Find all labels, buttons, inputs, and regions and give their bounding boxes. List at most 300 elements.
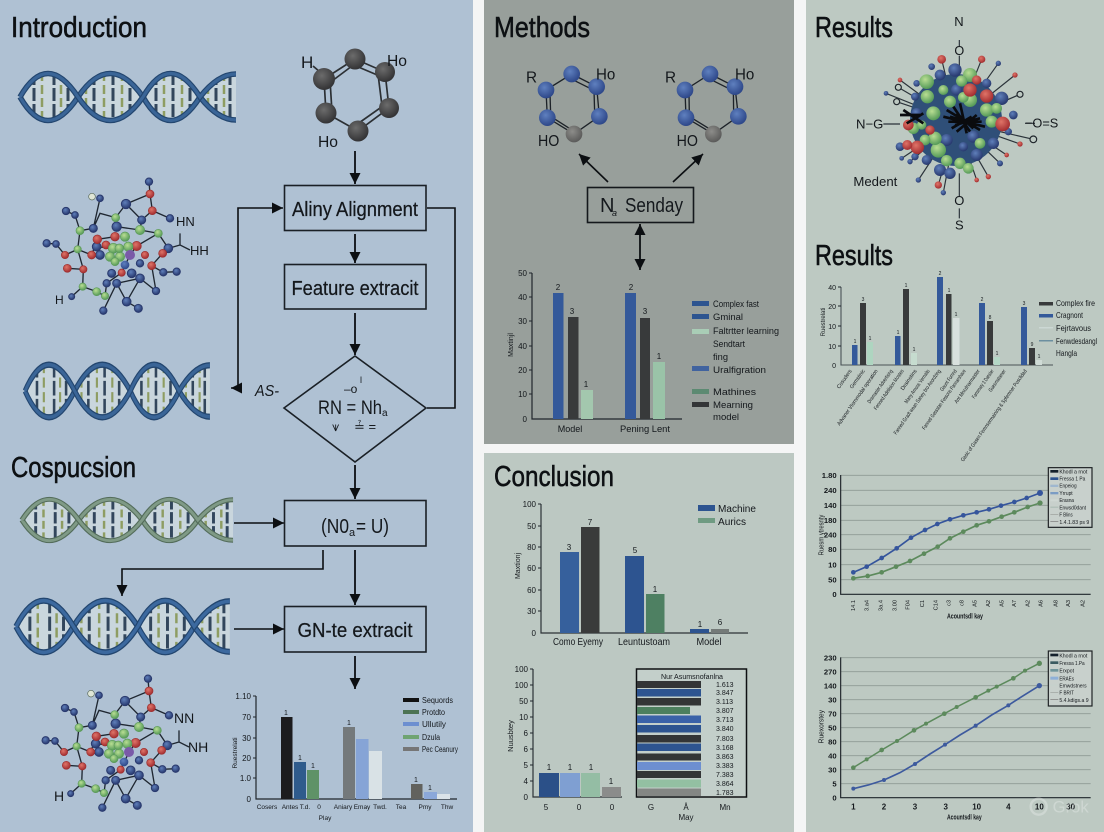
molecule: dense protein cluster: −O=S — [1025, 115, 1059, 130]
decision diamond: a — [382, 408, 388, 419]
legend: upper line chart — [1048, 468, 1092, 527]
bar chart: results: 1 — [948, 288, 951, 294]
table chart: horizontal bars with values: 3.713 — [716, 717, 734, 724]
bar chart: introduction: 1 — [414, 777, 418, 784]
bar chart: conclusion bottom: 50 — [519, 697, 529, 706]
molecule: dense protein cluster: N−G — [856, 116, 883, 131]
bar chart: results: 8 — [989, 315, 992, 321]
bar chart: introduction: 1.0 — [240, 774, 252, 783]
decision diamond: –o — [344, 382, 358, 396]
bar chart: methods: Maxtinjl — [508, 333, 515, 357]
bar chart: introduction: Play — [319, 815, 332, 822]
bar chart: conclusion top: 60 — [527, 564, 537, 573]
arrow: box to right ring — [673, 154, 703, 182]
bar chart: conclusion top: 7 — [588, 518, 593, 527]
bar chart: conclusion bottom: 100 — [515, 665, 529, 674]
arrow: feedback left loop into alignment — [231, 208, 283, 388]
bar chart: methods: 20 — [518, 366, 528, 375]
line chart: results upper: C14 — [933, 600, 939, 610]
bar chart: results: 10 — [828, 324, 836, 331]
molecule rings: methods: R — [526, 70, 537, 87]
legend: methods chart: Complex fast — [713, 299, 759, 309]
heading: Cospucsion: Cospucsion — [11, 452, 136, 484]
bar chart: conclusion bottom: 6 — [524, 729, 529, 738]
bar chart: conclusion top: 80 — [527, 543, 537, 552]
molecule network top — [43, 178, 190, 314]
table chart: horizontal bars with values: 1.783 — [716, 790, 734, 797]
heading: Results second: Results — [815, 240, 893, 272]
line chart: results lower: 80 — [828, 737, 837, 746]
arrow: two-way box to chart — [639, 224, 641, 270]
bar chart: results: 9 — [1031, 342, 1034, 348]
legend: lower line chart: Fressa 1.Pa — [1059, 661, 1085, 667]
bar chart: conclusion top: 3 — [567, 543, 572, 552]
bar chart: introduction: Ruestrelati — [232, 737, 239, 769]
label: HN: HN — [176, 214, 195, 229]
bar chart: conclusion top: 100 — [523, 500, 537, 509]
bar chart: introduction: 1 — [311, 763, 315, 770]
bar chart: results: Drainstins — [900, 369, 919, 392]
molecule: dense protein cluster: O — [954, 193, 964, 208]
legend: lower line chart: 5.4.kdigs.a 9 — [1059, 698, 1089, 704]
line chart: results lower: Acountsdl kay — [947, 812, 982, 821]
bar chart: conclusion top: Leuntustoam — [618, 637, 670, 648]
bar chart: results: Ruestrelati — [821, 308, 827, 336]
icon: blue DNA helix lower — [16, 599, 230, 654]
bar chart: conclusion top: 0 — [532, 629, 537, 638]
legend: introduction chart: Pec Ceanury — [422, 745, 458, 754]
bar chart: conclusion top: 1 — [653, 585, 658, 594]
line chart: results upper: Acountsdl kay — [947, 611, 984, 620]
bar chart: results: 1 — [1038, 354, 1041, 360]
arrow: box to left ring — [579, 154, 608, 182]
bar chart: results: Gemstinic — [849, 369, 867, 390]
bar chart: results: 3 — [1023, 301, 1026, 307]
bar chart: introduction: Emay — [354, 804, 371, 811]
bar chart: introduction: 1 — [298, 755, 302, 762]
table chart: horizontal bars with values: Å — [683, 803, 689, 812]
bar chart: introduction: 1 — [284, 710, 288, 717]
bar chart: conclusion bottom: 100 — [515, 681, 529, 690]
box: Feature extracit: Feature extracit — [292, 278, 419, 300]
watermark: Grok: Grok — [1053, 798, 1089, 817]
bar chart: results: 1 — [913, 347, 916, 353]
bar chart: introduction — [232, 692, 458, 822]
panel: introduction background — [0, 0, 473, 832]
label: NH: NH — [188, 739, 208, 755]
bar chart: methods: 1 — [584, 380, 589, 389]
bar chart: conclusion top: 30 — [527, 607, 537, 616]
legend: methods chart: model — [713, 412, 739, 422]
bar chart: methods: 3 — [570, 307, 575, 316]
box: Na Senday — [588, 188, 694, 222]
arrow: GN-te box to chart — [354, 656, 356, 689]
line chart: results lower: 40 — [828, 751, 837, 760]
legend: lower line chart: Erxpot — [1059, 669, 1074, 675]
bar chart: results: 1 — [955, 312, 958, 318]
legend: results bar chart — [1039, 298, 1097, 358]
line chart: results lower: 2 — [882, 802, 887, 811]
molecule network bottom — [42, 675, 189, 811]
bar chart: results: 20 — [828, 304, 836, 311]
box: GN-te extracit — [284, 606, 426, 652]
bar chart: results: Dramaster Advertising — [867, 369, 895, 405]
legend: introduction chart: Dzula — [422, 733, 440, 742]
legend: upper line chart: Erasna — [1059, 498, 1075, 504]
icon: benzene ring molecule: Ho — [318, 134, 338, 151]
arrow: formula to lower helix — [122, 550, 323, 596]
molecule: dense protein cluster: Medent — [853, 174, 898, 189]
bar chart: introduction: Twd. — [373, 804, 387, 811]
icon: benzene ring molecule — [301, 48, 407, 151]
table chart: horizontal bars with values: 3.864 — [716, 781, 734, 788]
bar chart: introduction: Pmy — [418, 804, 432, 811]
legend: conclusion chart: Machine — [718, 504, 756, 515]
panel: results background — [806, 0, 1104, 832]
line chart: results lower: 4 — [1006, 802, 1011, 811]
legend: conclusion chart — [698, 504, 756, 528]
bar chart: conclusion bottom — [506, 665, 622, 812]
line chart: results lower: 5 — [832, 779, 837, 788]
bar chart: methods: 50 — [518, 269, 528, 278]
line chart: results lower: 30 — [828, 695, 837, 704]
molecule rings: methods: HO — [677, 133, 698, 150]
icon: benzene ring molecule: Ho — [387, 53, 407, 70]
bar chart: conclusion top: 60 — [527, 586, 537, 595]
bar chart: results: Fanned Gessstan Fessons Pannarshave — [921, 369, 968, 431]
box: Na Senday: Senday — [625, 195, 683, 217]
arrow: green helix to formula box — [234, 522, 284, 524]
box: GN-te extracit: GN-te extracit — [298, 620, 413, 642]
line chart: results lower: 50 — [828, 723, 837, 732]
bar chart: conclusion bottom: 10 — [519, 713, 529, 722]
legend: introduction chart: Protdto — [422, 708, 445, 717]
decision diamond — [284, 356, 426, 462]
line chart: results lower: 10 — [972, 802, 982, 811]
legend: methods chart — [692, 299, 779, 422]
table chart: horizontal bars with values: 7.383 — [716, 772, 734, 779]
arrow: feedback right loop — [427, 208, 455, 408]
table chart: horizontal bars with values: 3.168 — [716, 745, 734, 752]
decision diamond: RN = Nh — [318, 398, 382, 419]
line chart: results upper: Ruesm ytresnty — [818, 514, 825, 555]
molecule: dense protein cluster — [853, 14, 1059, 232]
bar chart: methods: 40 — [518, 342, 528, 351]
legend: methods chart: Uralfigration — [713, 365, 766, 375]
arrow: decision to formula box — [354, 465, 356, 499]
heading: Conclusion: Conclusion — [494, 461, 614, 493]
line chart: results lower: 30 — [1066, 802, 1076, 811]
bar chart: conclusion bottom: 0 — [577, 803, 582, 812]
bar chart: conclusion bottom: 1 — [547, 763, 552, 772]
bar chart: results: Cosuders — [836, 369, 854, 390]
arrow: feature to decision — [354, 313, 356, 355]
bar chart: results: 1 — [854, 339, 857, 345]
line chart: results upper: 0 — [832, 590, 837, 599]
legend: results bar chart: Complex fire — [1056, 298, 1095, 308]
bar chart: conclusion bottom: 0 — [610, 803, 615, 812]
bar chart: methods: 40 — [518, 293, 528, 302]
molecule rings: methods: Ho — [735, 66, 754, 83]
line chart: results upper: A8 — [1053, 600, 1059, 607]
line chart: results upper: 10 — [828, 560, 837, 569]
molecule rings: methods: HO — [538, 133, 559, 150]
legend: upper line chart: Enpeiog — [1059, 484, 1077, 490]
legend: upper line chart: Enwsd0dant — [1059, 505, 1086, 511]
bar chart: conclusion bottom: 1 — [568, 763, 573, 772]
bar chart: conclusion top: 6 — [718, 618, 723, 627]
bar chart: conclusion top: Model — [696, 637, 722, 648]
legend: lower line chart: F BRIT — [1059, 691, 1074, 697]
decision diamond: ⩛ — [332, 419, 340, 434]
line chart: results upper — [818, 468, 1092, 620]
decision diamond: ≟ = — [354, 419, 376, 434]
table chart: horizontal bars with values: 3.383 — [716, 763, 734, 770]
bar chart: methods: 1 — [657, 352, 662, 361]
label: H lower: H — [54, 788, 64, 804]
bar chart: conclusion top: 1 — [698, 620, 703, 629]
bar chart: conclusion top: Maxtionj — [515, 553, 522, 579]
line chart: results upper: A7 — [1012, 600, 1018, 607]
legend: introduction chart: Sequords — [422, 696, 453, 705]
table chart: horizontal bars with values: 1.613 — [716, 682, 734, 689]
bar chart: introduction: Antes — [282, 804, 299, 811]
table chart: horizontal bars with values: G — [648, 803, 654, 812]
table chart: horizontal bars with values — [636, 669, 746, 822]
molecule rings: methods — [526, 66, 754, 150]
line chart: results upper: 50 — [828, 575, 837, 584]
legend: methods chart: Gminal — [713, 312, 743, 322]
line chart: results lower: Ruexorstey — [818, 710, 825, 743]
line chart: results upper: A6 — [1039, 600, 1045, 607]
line chart: results upper: 140 — [824, 501, 837, 510]
molecule: dense protein cluster: O — [954, 44, 964, 58]
bar chart: results: Many Amoss Vernaits — [904, 369, 932, 405]
arrow: benzene to alignment — [354, 151, 356, 184]
legend: methods chart: Mearning — [713, 400, 753, 410]
line chart: results upper: c3 — [947, 600, 953, 606]
bar chart: introduction: 0 — [317, 804, 321, 811]
line chart: results upper: A5 — [973, 600, 979, 607]
bar chart: conclusion bottom: 0 — [524, 793, 529, 802]
decision diamond: l — [360, 375, 362, 385]
line chart: results upper: A3 — [1066, 600, 1072, 607]
line chart: results upper: 240 — [824, 530, 837, 539]
box: Feature extracit — [284, 264, 426, 309]
bar chart: results: Ant Mncdnarmaster — [954, 369, 982, 405]
line chart: results upper: F04 — [906, 600, 912, 610]
bar chart: methods: 0 — [523, 415, 528, 424]
line chart: results upper: 3.00 — [892, 600, 898, 611]
line chart: results upper: 3.a4 — [864, 600, 870, 611]
bar chart: results: 1 — [869, 336, 872, 342]
heading: Methods: Methods — [494, 12, 590, 44]
table chart: horizontal bars with values: 3.113 — [716, 699, 733, 706]
icon: blue DNA helix top — [20, 72, 236, 122]
bar chart: results: 0 — [832, 363, 836, 370]
line chart: results upper: A2 — [986, 600, 992, 607]
line chart: results upper: 1.80 — [822, 471, 837, 480]
bar chart: introduction: Thw — [441, 804, 453, 811]
bar chart: results: Guesmatamer — [988, 369, 1008, 393]
legend: results bar chart: Fejrtavous — [1056, 323, 1091, 333]
table chart: horizontal bars with values: 7.803 — [716, 736, 734, 743]
molecule: dense protein cluster: S — [955, 217, 964, 232]
box: Aliny Alignment — [284, 186, 426, 230]
bar chart: introduction: T.d. — [300, 804, 310, 811]
legend: methods chart: Sendtart — [713, 339, 745, 349]
legend: lower line chart: Khodl a rnot — [1059, 653, 1088, 659]
bar chart: introduction: 1.10 — [235, 692, 252, 701]
box: formula — [284, 500, 426, 546]
legend: introduction chart — [403, 696, 458, 754]
arrow: alignment to feature — [354, 234, 356, 263]
molecule rings: methods: R — [665, 70, 676, 87]
legend: upper line chart: Khodl a rnot — [1059, 469, 1088, 475]
line chart: results upper: 80 — [828, 545, 837, 554]
line chart: results lower: 3 — [913, 802, 918, 811]
molecule: dense protein cluster: N — [954, 14, 964, 29]
bar chart: conclusion bottom: 4 — [524, 777, 529, 786]
line chart: results upper: A2 — [1081, 600, 1087, 607]
heading: Introduction: Introduction — [11, 12, 147, 44]
table chart: horizontal bars with values: Nur Asumsnofanlna — [661, 674, 723, 681]
line chart: results upper: 14.1 — [851, 600, 857, 611]
line chart: results lower — [818, 651, 1092, 821]
bar chart: results: 1 — [905, 283, 908, 289]
bar chart: conclusion top: Como Eyemy — [553, 637, 603, 648]
table chart: horizontal bars with values: Mn — [719, 803, 731, 812]
line chart: results lower: 140 — [824, 681, 837, 690]
bar chart: methods: 3 — [643, 307, 648, 316]
table chart: horizontal bars with values: 3.840 — [716, 726, 734, 733]
bar chart: conclusion bottom: 5 — [524, 761, 529, 770]
box: formula: (N0 — [321, 516, 349, 538]
bar chart: conclusion top: 50 — [527, 522, 537, 531]
line chart: results upper: 3a.4 — [878, 600, 884, 611]
line chart: results upper: A5 — [999, 600, 1005, 607]
line chart: results upper: C1 — [920, 600, 926, 607]
molecule rings: methods: Ho — [596, 66, 615, 83]
heading: Results top: Results — [815, 12, 893, 44]
panel: conclusion background — [484, 453, 794, 832]
line chart: results lower: 270 — [824, 667, 837, 676]
bar chart: results: 10 — [828, 344, 836, 351]
bar chart: methods: Model — [558, 424, 582, 434]
legend: results bar chart: Hangla — [1056, 348, 1077, 358]
label: H: H — [55, 293, 64, 307]
line chart: results upper: A2 — [1025, 600, 1031, 607]
box: formula: a — [349, 527, 356, 539]
label: AS-: AS- — [254, 383, 279, 400]
label: HH: HH — [190, 243, 209, 258]
legend: introduction chart: Ullutily — [422, 720, 446, 729]
legend: methods chart: Mathines — [713, 387, 757, 397]
line chart: results lower: 10 — [1035, 802, 1044, 811]
bar chart: introduction: 1 — [428, 785, 432, 792]
box: formula: = U) — [356, 516, 389, 538]
legend: upper line chart: Yrrupt — [1059, 491, 1073, 497]
line chart: results upper: c8 — [959, 600, 965, 606]
legend: lower line chart: ERAEs — [1059, 676, 1074, 682]
bar chart: results: 1 — [897, 330, 900, 336]
bar chart: introduction: 20 — [242, 754, 252, 763]
line chart: results lower: 0 — [832, 793, 837, 802]
legend: conclusion chart: Aurics — [718, 517, 746, 528]
bar chart: conclusion top: 5 — [633, 546, 638, 555]
table chart: horizontal bars with values: May — [678, 813, 694, 822]
bar chart: conclusion bottom: Nuusbtey — [506, 720, 515, 752]
bar chart: introduction: 1 — [347, 720, 351, 727]
bar chart: methods: 10 — [518, 390, 528, 399]
bar chart: results: Gaunt Fumnd — [939, 369, 959, 393]
bar chart: results: 3 — [862, 297, 865, 303]
bar chart: results: 1 — [996, 351, 999, 357]
table chart: horizontal bars with values: 3.807 — [716, 708, 734, 715]
box: Na Senday: N — [600, 195, 614, 217]
legend: upper line chart: 1.4.1.83 ps 9 — [1059, 520, 1089, 526]
icon: green DNA helix — [22, 498, 233, 542]
line chart: results lower: 30 — [828, 765, 837, 774]
icon: blue DNA helix middle — [25, 363, 210, 419]
bar chart: introduction: 70 — [242, 713, 252, 722]
bar chart: introduction: Cosers — [257, 804, 278, 811]
bar chart: results: 2 — [981, 297, 984, 303]
bar chart: results: Gasic of Gasen Femnsermaining & Spfemner Posclidad — [960, 369, 1029, 463]
bar chart: methods: 2 — [556, 283, 561, 292]
bar chart: introduction: Tea — [396, 804, 407, 811]
bar chart: conclusion top — [515, 500, 756, 648]
bar chart: results: Fenned Adelision Mostes — [873, 369, 906, 411]
bar chart: methods: 2 — [629, 283, 634, 292]
line chart: results upper: 180 — [824, 516, 837, 525]
bar chart: results: 2 — [939, 271, 942, 277]
icon: benzene ring molecule: H — [301, 53, 313, 72]
bar chart: results: Fansmary 3 Dansler — [971, 369, 996, 400]
arrow: lower helix to GN-te box — [234, 628, 284, 630]
bar chart: conclusion bottom: 1 — [609, 777, 614, 786]
bar chart: methods: Pening Lent — [620, 424, 671, 434]
legend: results bar chart: Cragnont — [1056, 310, 1083, 320]
legend: methods chart: Faltrtter learning — [713, 326, 779, 336]
legend: upper line chart: Fressa 1 Pa — [1059, 477, 1086, 483]
bar chart: results: Fanned Gradt wean Saney bro Aeordzing — [893, 369, 943, 436]
bar chart: conclusion bottom: 1 — [589, 763, 594, 772]
bar chart: results — [821, 271, 1097, 463]
bar chart: conclusion bottom: 5 — [544, 803, 549, 812]
arrow: formula to GN-te box — [354, 550, 356, 605]
legend: methods chart: fing — [713, 352, 728, 362]
bar chart: conclusion bottom: 6 — [524, 745, 529, 754]
box: Na Senday: a — [612, 208, 617, 218]
bar chart: introduction: 30 — [242, 734, 252, 743]
table chart: horizontal bars with values: 3.847 — [716, 690, 734, 697]
bar chart: methods: 30 — [518, 317, 528, 326]
bar chart: results: Advaner Vtornmodal operation — [836, 369, 880, 427]
line chart: results upper: 240 — [824, 486, 837, 495]
bar chart: introduction: 0 — [247, 795, 252, 804]
legend: upper line chart: F Blins — [1059, 513, 1073, 519]
table chart: horizontal bars with values: 3.863 — [716, 754, 734, 761]
legend: lower line chart — [1048, 651, 1092, 706]
legend: lower line chart: Emwdstners — [1059, 683, 1087, 689]
line chart: results lower: 3 — [943, 802, 948, 811]
line chart: results lower: 1 — [851, 802, 856, 811]
label: NN: NN — [174, 710, 194, 726]
box: Aliny Alignment: Aliny Alignment — [292, 199, 418, 221]
bar chart: introduction: Aniary — [334, 804, 353, 811]
bar chart: methods — [508, 269, 779, 434]
